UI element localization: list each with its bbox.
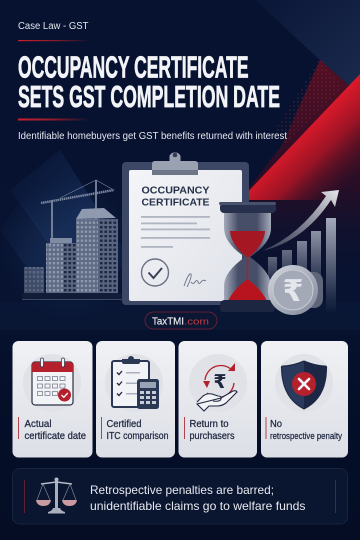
label: No	[270, 419, 282, 430]
kicker: Case Law - GST: Case Law - GST	[18, 21, 88, 32]
banner text: Retrospective penalties are barred;	[90, 483, 274, 497]
label: Certified	[106, 419, 142, 430]
accent bar	[101, 417, 102, 439]
icon: calendar	[23, 354, 81, 412]
crane	[41, 180, 114, 240]
accent line under title	[18, 118, 90, 120]
illustration: clipboard occupancy certificate: CERTIFICATE	[142, 198, 210, 208]
certificate heading: OCCUPANCY	[142, 186, 210, 196]
label: ITC comparison	[106, 431, 169, 442]
panel: certified ITC comparison	[96, 341, 175, 458]
illustration: clipboard occupancy certificate	[122, 152, 249, 305]
subtitle: Identifiable homebuyers get GST benefits returned with interest	[18, 130, 287, 142]
logo badge TaxTMI.com	[145, 312, 217, 329]
logo badge TaxTMI.com: TaxTMI	[152, 316, 184, 328]
label: Actual	[24, 419, 52, 430]
signature	[184, 274, 206, 287]
label: certificate date	[24, 431, 86, 442]
panel: bottom banner	[12, 468, 348, 524]
accent bar	[184, 417, 185, 439]
clip	[152, 152, 198, 175]
title	[18, 50, 280, 114]
label: retrospective penalty	[270, 431, 342, 442]
panel: actual certificate date	[12, 341, 92, 458]
label: Return to	[190, 419, 229, 430]
icon: scales of justice	[36, 478, 77, 514]
check stamp	[142, 259, 168, 286]
accent line top	[18, 40, 90, 41]
illustration: growth bars and arrow	[262, 190, 339, 313]
panel: return to purchasers	[178, 341, 257, 458]
banner text: unidentifiable claims go to welfare funds	[90, 499, 306, 513]
illustration: hourglass	[219, 202, 276, 312]
illustration: buildings and crane	[0, 180, 140, 320]
text lines	[141, 216, 210, 248]
logo badge TaxTMI.com: .com	[184, 316, 209, 326]
label: purchasers	[190, 431, 234, 442]
icon: shield with cross	[275, 354, 333, 412]
icon: rupee cycle and hand: ₹	[213, 371, 227, 393]
panel: no retrospective penalty	[261, 341, 348, 458]
illustration: rupee coin	[268, 265, 323, 315]
illustration: rupee coin: ₹	[283, 274, 303, 309]
icon: checklist and calculator	[105, 354, 163, 412]
accent bar	[266, 417, 267, 439]
accent bar	[18, 417, 19, 439]
